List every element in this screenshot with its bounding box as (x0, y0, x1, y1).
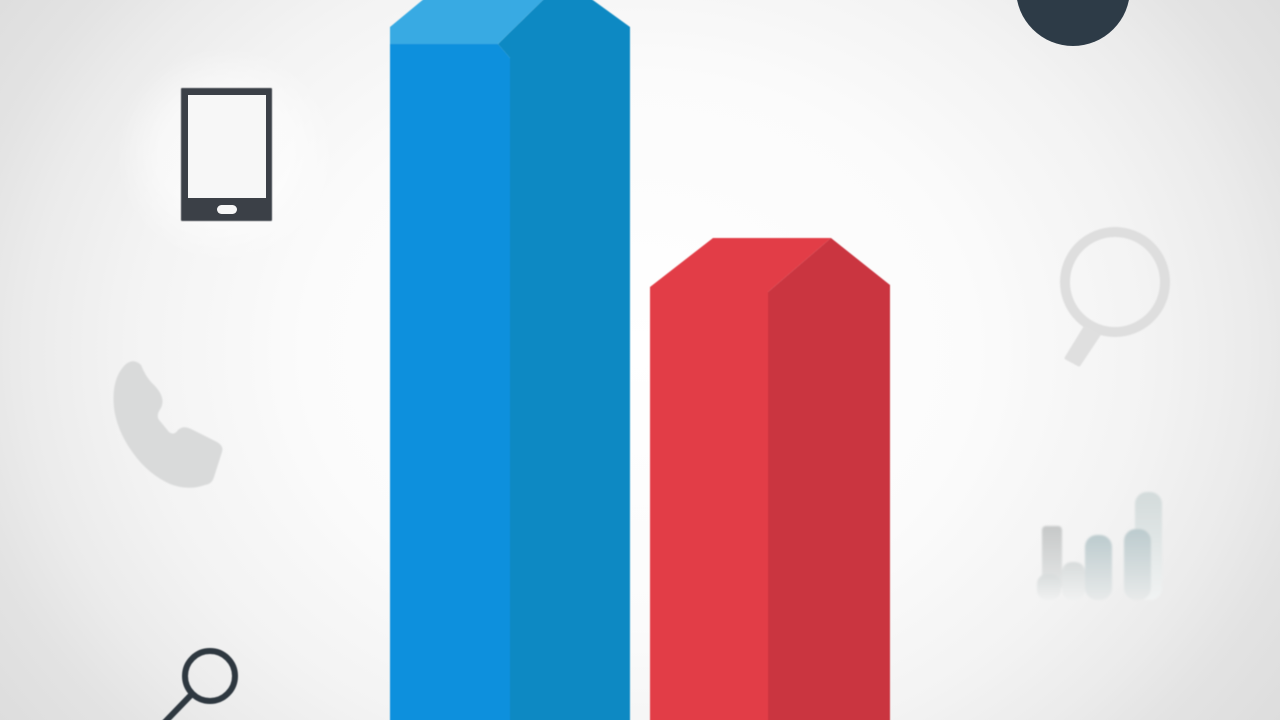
icon: dark circle (1016, 0, 1130, 46)
blue bar side face (498, 0, 630, 720)
short bar (1037, 574, 1061, 600)
icon: light magnifier (1065, 232, 1165, 365)
light magnifier lens (1065, 232, 1165, 332)
blue bar (390, 0, 630, 720)
bar four (1085, 535, 1112, 600)
icon: telephone handset (114, 361, 222, 488)
red bar front face (650, 238, 831, 720)
light magnifier handle (1066, 327, 1099, 365)
icon: tablet (116, 47, 336, 263)
tablet halo (116, 47, 336, 263)
icon: faded bar chart (1037, 492, 1162, 600)
back bar (1135, 492, 1162, 600)
tablet screen (188, 95, 266, 198)
tablet button (217, 205, 237, 214)
icon: dark magnifier (163, 651, 235, 720)
dark magnifier handle (163, 695, 191, 720)
red bar side face (768, 238, 890, 720)
bar one (1042, 526, 1062, 590)
blue bar front face (390, 44, 510, 720)
bar three (1062, 562, 1085, 600)
bar five (1124, 529, 1151, 600)
red bar (650, 238, 890, 720)
blue bar top face (390, 0, 545, 44)
dark magnifier lens (185, 651, 235, 701)
tablet body (181, 88, 272, 221)
